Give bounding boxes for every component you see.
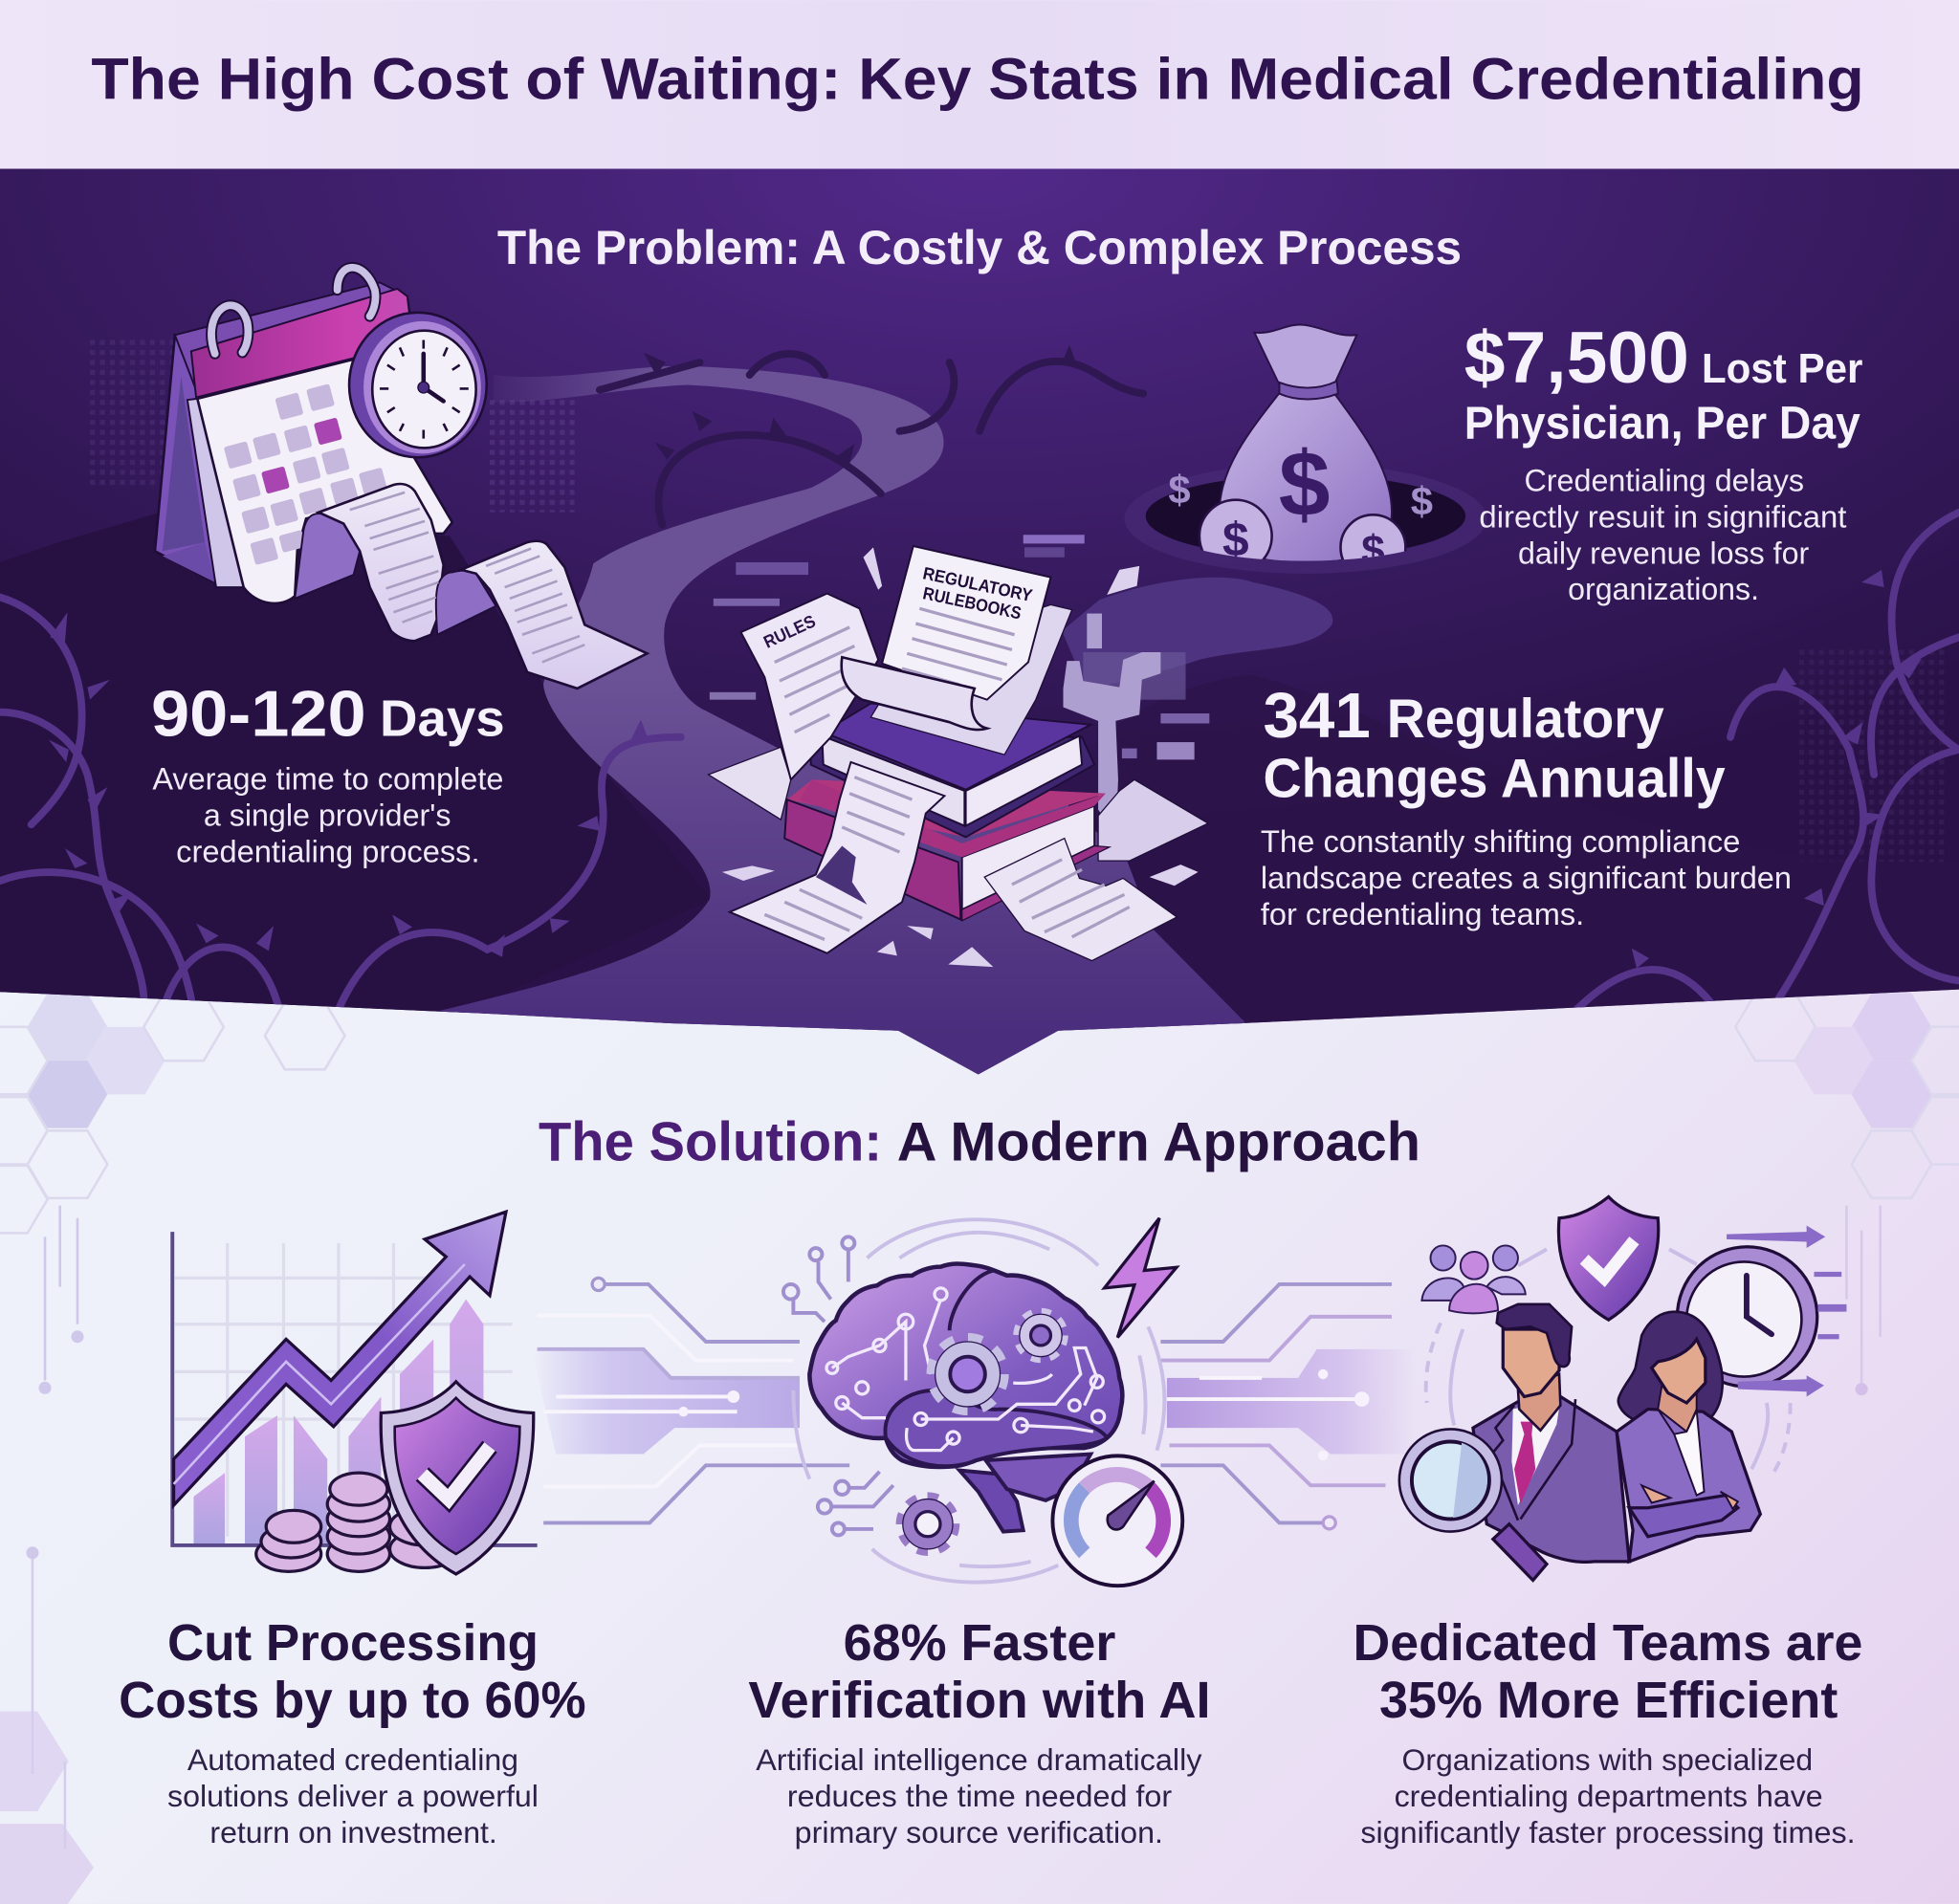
- left energy band: [531, 1349, 800, 1455]
- paper scroll: [295, 514, 360, 599]
- heading: 35% More Efficient: [1379, 1673, 1838, 1729]
- lightning bolt: [1105, 1218, 1177, 1338]
- icon: calendar, clock and paper scroll: [155, 268, 648, 689]
- rulebooks label: [921, 562, 1034, 624]
- woman arm: [1629, 1496, 1738, 1537]
- rising arrow: [174, 1212, 506, 1505]
- description: [1360, 1743, 1856, 1849]
- decorative hexagon and circuit pattern: [0, 994, 1959, 1904]
- description: return on investment.: [209, 1816, 497, 1849]
- rules sheet: [741, 594, 878, 779]
- description: The constantly shifting compliance: [1261, 823, 1740, 859]
- calendar page: [197, 359, 452, 603]
- smoke band from money bag: [1062, 578, 1332, 689]
- icon: AI brain: [783, 1218, 1182, 1586]
- chart bars: [193, 1300, 483, 1545]
- icon: dedicated team: [1399, 1197, 1846, 1580]
- description: credentialing process.: [176, 833, 480, 868]
- description: a single provider's: [204, 798, 451, 833]
- clock: [349, 313, 487, 457]
- description: significantly faster processing times.: [1360, 1816, 1856, 1849]
- description: credentialing departments have: [1395, 1780, 1823, 1813]
- dark scene illustration: [0, 338, 1959, 1087]
- broken wall fragments: [1064, 614, 1160, 835]
- dark hill: [0, 514, 626, 1013]
- brain stem: [959, 1471, 1024, 1532]
- benefit: faster verification: [748, 1615, 1211, 1849]
- coins: [1198, 498, 1273, 559]
- rulebooks sheet: [882, 546, 1050, 700]
- speed gauge: [1052, 1455, 1182, 1586]
- traces: [538, 1284, 1392, 1522]
- team icon: [1421, 1245, 1526, 1313]
- bag clipped by hole: $: [1361, 528, 1385, 575]
- chart grid: [175, 1243, 513, 1537]
- description: Automated credentialing: [187, 1743, 518, 1777]
- value: 341: [1263, 681, 1371, 752]
- rules label: RULES: [760, 610, 819, 652]
- section heading: the solution: [539, 1112, 1420, 1173]
- large gear: [933, 1339, 1002, 1410]
- description: solutions deliver a powerful: [167, 1780, 539, 1813]
- description: Credentialing delays: [1524, 463, 1804, 498]
- unit: Days: [380, 691, 505, 748]
- man hair: [1497, 1304, 1572, 1367]
- icon: regulatory books and papers: [709, 535, 1209, 967]
- woman suit: [1617, 1410, 1760, 1562]
- bag tie: [1279, 382, 1338, 400]
- hole: [1146, 475, 1465, 558]
- heading: [748, 1615, 1211, 1729]
- speed arrows: [1727, 1226, 1846, 1396]
- subheading: Physician, Per Day: [1464, 398, 1860, 449]
- woman shirt: [1658, 1410, 1705, 1496]
- small gear: [1017, 1312, 1065, 1359]
- side circuit nodes: [783, 1237, 893, 1535]
- woman neck: [1658, 1387, 1697, 1432]
- dollar sign: $: [1279, 434, 1330, 536]
- icon: money bag in a hole: [1125, 324, 1486, 580]
- outside gear: [900, 1497, 956, 1551]
- right loose sheet: [1098, 779, 1208, 861]
- circuit connectors: [531, 1278, 1417, 1529]
- orbit lines: [1450, 1249, 1768, 1469]
- description: landscape creates a significant burden: [1261, 860, 1792, 895]
- lower magenta book: [787, 779, 1106, 837]
- unit line 1: Regulatory: [1387, 689, 1664, 750]
- left loose sheet: [709, 747, 791, 820]
- bag body: [1220, 390, 1392, 562]
- benefit: dedicated teams: [1354, 1615, 1862, 1849]
- calendar rings: [211, 268, 376, 354]
- description: for credentialing teams.: [1261, 896, 1584, 931]
- description: [152, 761, 503, 868]
- man neck: [1518, 1374, 1560, 1431]
- calendar header: [191, 289, 411, 398]
- stat: days: [151, 679, 505, 868]
- magnifier: [1399, 1429, 1547, 1580]
- floating dollars: $: [1168, 468, 1191, 513]
- rulebooks label: RULEBOOKS: [921, 582, 1024, 624]
- calendar back band: [175, 282, 412, 400]
- description: daily revenue loss for: [1518, 535, 1809, 570]
- man head: [1503, 1329, 1559, 1396]
- woman hands: [1641, 1485, 1738, 1509]
- description: Artificial intelligence dramatically: [756, 1743, 1202, 1777]
- hanging torn sheet: [730, 762, 944, 953]
- heading: Costs by up to 60%: [119, 1673, 586, 1729]
- brain fold: [950, 1271, 993, 1330]
- upper purple book: [811, 736, 1094, 837]
- heading: Verification with AI: [748, 1673, 1211, 1729]
- paper shards: [722, 547, 1199, 967]
- thorn vines: [0, 513, 1959, 1018]
- calendar date grid: [224, 383, 387, 565]
- panel: the problem: [0, 169, 1959, 1087]
- bag clipped by hole: [1200, 324, 1405, 580]
- man suit: [1473, 1396, 1629, 1562]
- winding road: [501, 366, 1245, 1075]
- section heading: the problem: The Problem: A Costly & Complex Process: [497, 221, 1462, 274]
- description: [756, 1743, 1202, 1849]
- description: reduces the time needed for: [787, 1780, 1172, 1813]
- right fallen sheet: [984, 839, 1177, 961]
- value: $7,500: [1464, 317, 1689, 399]
- panel background with pointer: [0, 169, 1959, 1075]
- description: [167, 1743, 539, 1849]
- back curled paper: [870, 604, 1072, 755]
- team clock: [1677, 1247, 1817, 1387]
- heading: Dedicated Teams are: [1354, 1615, 1862, 1672]
- cerebellum: [986, 1455, 1090, 1500]
- woman head: [1652, 1339, 1706, 1403]
- dashed orbit: [1426, 1323, 1791, 1472]
- icon: money bag in a hole: $: [1411, 478, 1433, 523]
- unit line 2: Changes Annually: [1263, 749, 1726, 810]
- unit: Lost Per: [1702, 346, 1863, 392]
- team shield: [1558, 1197, 1659, 1320]
- heading: 68% Faster: [844, 1615, 1116, 1672]
- side pages: [187, 399, 250, 587]
- curled page: [842, 657, 987, 730]
- description: [1479, 463, 1846, 606]
- calendar stand: [155, 335, 250, 583]
- description: primary source verification.: [795, 1816, 1163, 1849]
- halo arcs: [793, 1219, 1164, 1583]
- benefit: cut costs: [119, 1615, 586, 1849]
- woman hair: [1618, 1312, 1723, 1419]
- brain body: [809, 1264, 1122, 1467]
- right energy band: [1167, 1349, 1417, 1455]
- bag clipped by hole: $: [1222, 513, 1249, 566]
- shield: [381, 1382, 534, 1574]
- stat: regulatory changes: [1261, 681, 1792, 931]
- value: 90-120: [151, 679, 366, 751]
- arrow highlight: [174, 1264, 465, 1484]
- trace nodes: [678, 1369, 1370, 1460]
- description: [1261, 823, 1792, 931]
- coin stacks: [256, 1473, 460, 1571]
- heading: [119, 1615, 586, 1729]
- bag top: [1254, 324, 1356, 390]
- description: Organizations with specialized: [1401, 1743, 1813, 1777]
- brain circuits: [826, 1288, 1105, 1451]
- background pixel fragments: [710, 535, 1209, 759]
- header band: [0, 0, 1959, 169]
- road solid lower section: [436, 537, 1245, 1075]
- right dark ground: [1099, 675, 1959, 1023]
- description: Average time to complete: [152, 761, 503, 797]
- heading: Cut Processing: [167, 1615, 539, 1672]
- man shirt and tie: [1511, 1399, 1560, 1505]
- section heading: the solution: The Solution:: [539, 1112, 882, 1173]
- chart axes: [172, 1232, 538, 1545]
- icon: rising chart with shield and coins: [172, 1212, 538, 1574]
- torn hole: [816, 845, 867, 905]
- hole halo: [1125, 464, 1486, 574]
- vines behind path: [600, 354, 1143, 525]
- brain lower lobe: [885, 1390, 1107, 1466]
- rulebooks label: REGULATORY: [921, 562, 1034, 605]
- title: The High Cost of Waiting: Key Stats in Medical Credentialing: [91, 46, 1864, 112]
- description: directly resuit in significant: [1479, 498, 1846, 534]
- section heading: the solution: A Modern Approach: [897, 1112, 1420, 1173]
- stat: revenue lost: [1464, 317, 1863, 606]
- heading: [1354, 1615, 1862, 1729]
- description: organizations.: [1568, 571, 1759, 606]
